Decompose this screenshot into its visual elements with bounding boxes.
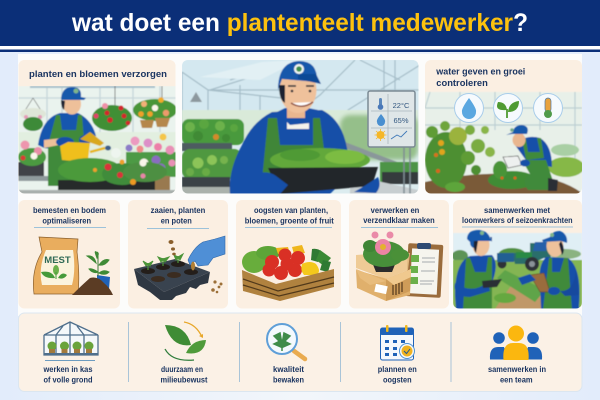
- text: milieubewust: [160, 374, 208, 384]
- icon: water drop: [454, 94, 484, 122]
- panel: planten en bloemen verzorgen: [18, 60, 177, 194]
- left plant rows: [182, 119, 244, 145]
- back flower bed: [126, 152, 176, 177]
- heading: controleren: [436, 78, 488, 88]
- climate sign: 22°C, 65%: 22°C: [393, 101, 410, 110]
- worker right: [518, 231, 580, 309]
- worker kneeling: [503, 125, 558, 191]
- text: oogsten: [383, 374, 412, 384]
- panel: central greenhouse worker: [182, 60, 420, 194]
- text: optimaliseren: [42, 216, 91, 226]
- text: [33, 205, 106, 226]
- text: [160, 364, 208, 384]
- ground and plants: [425, 174, 582, 194]
- worker left: [455, 230, 502, 309]
- icon: droplet: [377, 114, 385, 126]
- text: samenwerken met: [484, 205, 550, 215]
- text: [273, 364, 304, 384]
- flower clusters: [115, 86, 162, 105]
- heading: planten en bloemen verzorgen: [29, 69, 167, 79]
- icon: thermometer: [534, 94, 562, 122]
- scene: [452, 230, 582, 309]
- title: wat doet een plantenteelt medewerker?: [71, 9, 528, 37]
- icon: sprout: [494, 94, 522, 122]
- text: [488, 364, 546, 384]
- illustration: harvest crate: [242, 245, 334, 301]
- icon: box: [356, 253, 411, 301]
- panel: oogsten: [236, 200, 341, 308]
- text: bloemen, groente of fruit: [245, 216, 334, 226]
- icon: seed tray: [134, 254, 210, 300]
- climate sign: 22°C, 65%: 65%: [393, 116, 409, 125]
- icon: thermometer: [379, 98, 382, 105]
- text: [151, 205, 205, 226]
- icon: sun: [376, 131, 384, 139]
- icon: calendar: [380, 325, 414, 360]
- icon: gloved hand and seeds: [168, 236, 225, 293]
- icon: soil and plant: [72, 252, 113, 295]
- header banner: [0, 0, 600, 52]
- text: werken in kas: [43, 364, 93, 374]
- text: loonwerkers of seizoenkrachten: [462, 215, 573, 225]
- seedlings and tray: [270, 148, 370, 168]
- text: oogsten van planten,: [254, 205, 328, 215]
- central white sheet: [18, 54, 582, 316]
- text: zaaien, planten: [151, 205, 205, 215]
- text: [245, 205, 334, 226]
- text: plannen en: [378, 364, 417, 374]
- heading: water geven en groei: [435, 66, 525, 76]
- panel: bottom strip: [18, 313, 582, 392]
- text: duurzaam en: [161, 364, 203, 374]
- icon: team: [490, 326, 542, 360]
- text: en poten: [161, 216, 192, 226]
- climate sign: 22°C, 65%: [368, 91, 415, 147]
- hanging basket left: [25, 98, 41, 110]
- text: verwerken en: [371, 205, 419, 215]
- text: [43, 364, 93, 384]
- left pots: [18, 162, 44, 180]
- text: een team: [500, 374, 533, 384]
- watering can: [60, 142, 90, 161]
- text: of volle grond: [44, 374, 92, 384]
- panel: zaaien, planten en poten: [128, 200, 228, 308]
- worker: [38, 87, 121, 186]
- text: bemesten en bodem: [33, 205, 106, 215]
- icon: fertilizer bag: MEST: [44, 255, 71, 266]
- growth line: [391, 131, 407, 139]
- icon: potted flower: [363, 232, 409, 272]
- panel: bemesten en bodem optimaliseren: [18, 200, 120, 308]
- icon: greenhouse: [44, 322, 98, 356]
- icon: clipboard: [406, 243, 443, 298]
- text: [462, 207, 572, 223]
- icon: magnifier: [267, 324, 305, 359]
- text: [363, 205, 435, 225]
- text: kwaliteit: [273, 364, 304, 374]
- text: bewaken: [273, 374, 304, 384]
- icon: leaves with arrows: [165, 322, 206, 360]
- worker: [230, 61, 352, 194]
- panel: water geven en groei controleren: [425, 60, 584, 194]
- panel: verwerken en verzendklaar maken: [349, 200, 449, 308]
- right plant rows: [340, 115, 418, 160]
- front seedlings: [57, 180, 156, 191]
- panel: samenwerken met loonwerkers of seizoenkrachten: [452, 200, 582, 309]
- text: verzendklaar maken: [363, 215, 435, 225]
- tractor: [512, 243, 551, 264]
- text: samenwerken in: [488, 364, 546, 374]
- text: [378, 364, 417, 384]
- greenhouse scene: [18, 86, 177, 194]
- heading: [436, 68, 525, 86]
